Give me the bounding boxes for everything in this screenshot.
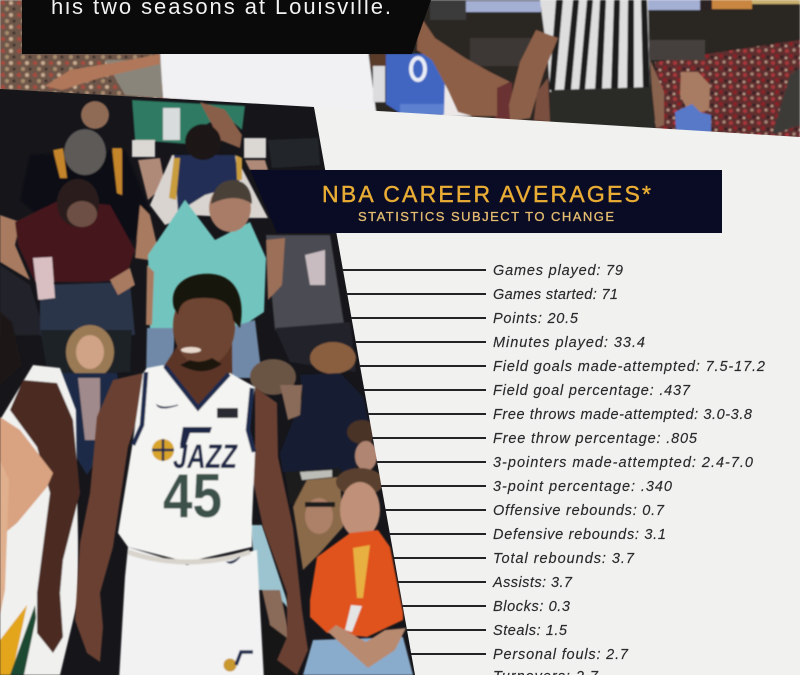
photo: main player xyxy=(75,274,308,675)
player: head xyxy=(173,274,242,371)
player: number 45: 45 xyxy=(163,462,222,531)
stat list: Field goals made-attempted: 7.5-17.2 xyxy=(493,359,765,375)
player: shorts xyxy=(119,547,264,675)
stat list: Points: 20.5 xyxy=(493,311,579,327)
stat list: Assists: 3.7 xyxy=(492,575,573,591)
heading bar xyxy=(250,170,722,233)
heading subtitle: STATISTICS SUBJECT TO CHANGE xyxy=(358,209,614,224)
photo: left teammate xyxy=(0,312,80,675)
stat list: Personal fouls: 2.7 xyxy=(493,647,629,663)
player: jersey xyxy=(118,365,255,562)
stat list: Field goal percentage: .437 xyxy=(493,383,691,399)
stat list: Games played: 79 xyxy=(493,263,623,279)
player: jersey logo JAZZ: JAZZ xyxy=(173,438,238,476)
player: jersey logo JAZZ xyxy=(152,427,238,476)
photo: forearm and hand xyxy=(417,13,510,116)
photo: left player arm xyxy=(45,54,160,90)
stat list: Minutes played: 33.4 xyxy=(493,335,645,351)
photo: scoreboard xyxy=(430,0,800,20)
photo: small Duke player xyxy=(675,72,711,132)
panel: crowd and player photo xyxy=(0,89,420,675)
stat list: 3-point percentage: .340 xyxy=(493,479,672,495)
photo: referee xyxy=(509,0,664,129)
photo: blue jersey number 0 xyxy=(370,54,477,116)
photo: player white shorts xyxy=(160,50,376,112)
player: jersey trim xyxy=(133,366,254,452)
photo: crowd right xyxy=(470,38,800,140)
stat list: Free throws made-attempted: 3.0-3.8 xyxy=(493,407,752,423)
stat list: Offensive rebounds: 0.7 xyxy=(493,503,665,519)
stat list: Free throw percentage: .805 xyxy=(493,431,698,447)
player: shorts waistband xyxy=(128,552,250,562)
player: shorts logo xyxy=(224,652,253,672)
player: patch xyxy=(217,408,238,418)
player: neck xyxy=(163,340,232,412)
photo: crowd left xyxy=(0,0,175,105)
stat list: Steals: 1.5 xyxy=(493,623,568,639)
stat list: 3-pointers made-attempted: 2.4-7.0 xyxy=(493,455,753,471)
photo: crowd figures xyxy=(0,100,413,675)
stat list xyxy=(342,263,765,675)
heading title: NBA CAREER AVERAGES* xyxy=(322,181,651,207)
panel: black caption box xyxy=(22,0,431,54)
panel: paper background xyxy=(314,107,800,675)
panel: top game photo xyxy=(0,0,800,145)
player: arms xyxy=(75,373,308,675)
player: nike swoosh xyxy=(157,405,178,408)
stat list: Total rebounds: 3.7 xyxy=(493,551,635,567)
player: shorts nike xyxy=(227,557,240,563)
stat list: Blocks: 0.3 xyxy=(493,599,570,615)
photo: railing xyxy=(105,60,162,98)
stat list: Games started: 71 xyxy=(493,287,618,303)
stat list: Defensive rebounds: 3.1 xyxy=(493,527,666,543)
